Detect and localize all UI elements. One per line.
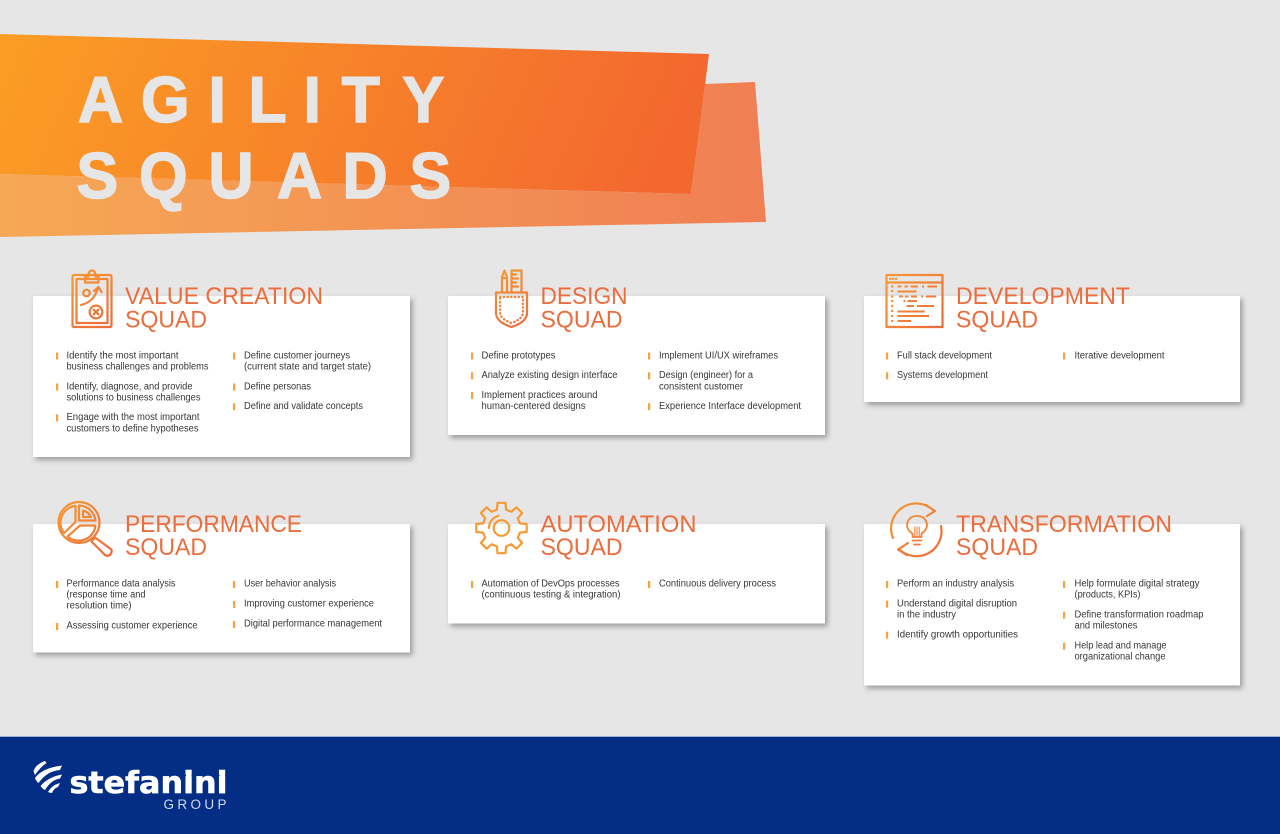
list: left column [56, 350, 209, 434]
list: right column [648, 350, 801, 412]
group label: GROUP [164, 797, 226, 812]
list: left column: in the industry [897, 610, 956, 620]
list: left column: (continuous testing & integration) [482, 590, 620, 601]
banner: light orange ribbon [0, 82, 766, 237]
panel: transformation squad [864, 503, 1240, 686]
heading [125, 284, 323, 334]
list: left column: Identify the most important [66, 350, 179, 361]
list: right column: (current state and target state) [244, 362, 371, 373]
heading [125, 512, 302, 561]
footer band [0, 736, 1280, 834]
list: left column: Understand digital disruption [897, 598, 1017, 609]
list: right column: (products, KPIs) [1074, 590, 1140, 601]
list: left column: Full stack development [897, 350, 992, 361]
title: AGILITY [78, 63, 444, 136]
list: left column: Engage with the most important [66, 412, 200, 423]
heading [540, 284, 628, 334]
card background [864, 524, 1240, 686]
heading: DESIGN [540, 284, 628, 310]
list: left column: Identify, diagnose, and provide [66, 381, 192, 392]
list: right column: Digital performance management [244, 619, 382, 630]
heading: SQUAD [540, 535, 622, 561]
logo: Stefanini Group [34, 761, 228, 812]
panel: development squad [864, 275, 1240, 402]
list: left column: business challenges and problems [66, 362, 209, 373]
card background [33, 524, 410, 652]
i stem fills [186, 772, 225, 782]
list: left column [886, 579, 1018, 640]
list: right column: and milestones [1074, 621, 1138, 632]
list: left column [471, 579, 620, 601]
icon: magnifier with pie chart [58, 502, 112, 556]
list: left column: Automation of DevOps processes [482, 579, 620, 590]
panel: performance squad [33, 502, 410, 652]
list: right column: Define transformation roadmap [1074, 609, 1204, 620]
icon: clipboard with play diagram [72, 270, 112, 327]
list: left column: (response time and [66, 590, 146, 601]
heading [956, 512, 1172, 561]
heading: SQUAD [956, 308, 1038, 334]
banner: dark orange ribbon [0, 34, 709, 194]
list: right column: Continuous delivery process [659, 579, 776, 590]
list: left column: Define prototypes [482, 350, 556, 361]
title [77, 63, 451, 212]
list: right column [1063, 579, 1204, 663]
panel: automation squad [448, 503, 825, 624]
list: left column: Assessing customer experience [66, 621, 198, 632]
heading: DEVELOPMENT [956, 284, 1130, 310]
list: right column: Experience Interface development [659, 401, 801, 412]
list: left column: resolution time) [66, 601, 132, 612]
title: SQUADS [77, 139, 451, 212]
list: right column [233, 579, 382, 630]
list: right column: Define customer journeys [244, 350, 350, 361]
panel: value creation squad [33, 270, 410, 457]
list: left column: customers to define hypotheses [66, 423, 199, 434]
icon: code window [886, 275, 942, 327]
list: right column [233, 350, 371, 412]
panel: design squad [448, 270, 825, 435]
icon: pocket with pencil and ruler [496, 270, 527, 327]
heading [956, 284, 1130, 334]
list: left column: Implement practices around [482, 390, 598, 401]
list: left column: human-centered designs [482, 401, 586, 412]
list: right column: Improving customer experience [244, 599, 374, 610]
list: right column: Design (engineer) for a [659, 370, 754, 381]
icon: striped globe [34, 761, 62, 793]
list: left column: Analyze existing design interface [482, 370, 618, 381]
heading: SQUAD [956, 535, 1038, 561]
wordmark: stefanini [70, 766, 228, 801]
list: right column: Help lead and manage [1074, 640, 1166, 651]
card background [448, 524, 825, 624]
list: right column: Iterative development [1074, 350, 1165, 361]
list: right column: consistent customer [659, 381, 744, 392]
list: left column [56, 579, 198, 632]
list: left column: Performance data analysis [66, 579, 176, 590]
card background [33, 296, 410, 457]
list: left column: Identify growth opportunities [897, 629, 1018, 640]
list: left column [471, 350, 618, 412]
heading: SQUAD [540, 308, 622, 334]
heading: AUTOMATION [540, 512, 696, 538]
heading: SQUAD [125, 308, 207, 334]
heading: SQUAD [125, 535, 207, 561]
list: right column: Help formulate digital strategy [1074, 579, 1200, 590]
list: left column: Perform an industry analysis [897, 579, 1014, 590]
header banner [0, 34, 766, 237]
list: left column: solutions to business challenges [66, 393, 201, 404]
heading: TRANSFORMATION [956, 512, 1172, 538]
icon: gear [476, 503, 527, 553]
list: right column: Implement UI/UX wireframes [659, 350, 778, 361]
list: right column: organizational change [1074, 652, 1166, 663]
heading: VALUE CREATION [125, 284, 323, 310]
list: right column: User behavior analysis [244, 579, 336, 590]
list: right column: Define personas [244, 381, 311, 392]
card background [864, 296, 1240, 402]
heading: PERFORMANCE [125, 512, 302, 538]
list: right column: Define and validate concepts [244, 401, 363, 412]
list: left column [886, 350, 992, 381]
list: left column: Systems development [897, 370, 988, 381]
heading [540, 512, 696, 561]
card background [448, 296, 825, 435]
icon: light bulb with cycle arrows [891, 503, 942, 556]
